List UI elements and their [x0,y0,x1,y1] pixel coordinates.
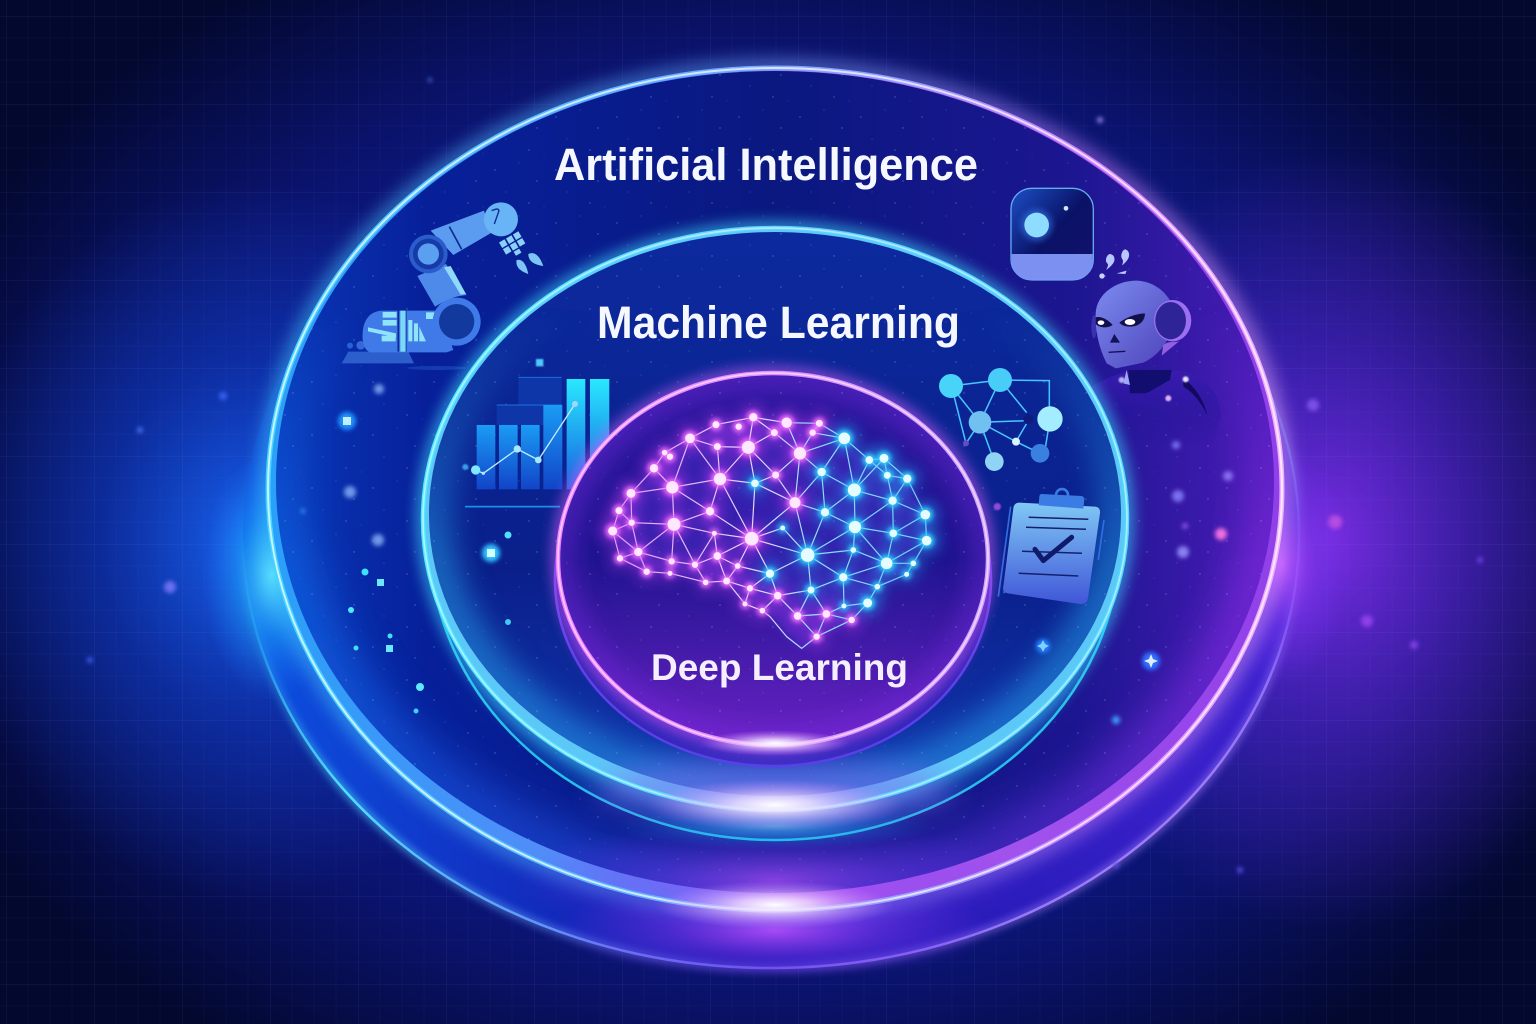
icon: sparkle right [1142,652,1160,670]
heading: Machine Learning: Machine Learning [597,297,960,348]
icon: network graph [939,368,1063,471]
icon: chat robot device [1011,188,1129,280]
heading: Deep Learning: Deep Learning [651,647,908,688]
icon: sparkle left [338,412,356,430]
icon: glowing neural network brain [609,414,930,648]
icon: robot arm [342,202,543,370]
icon: sparkle lower right [1036,639,1050,653]
heading: Artificial Intelligence: Artificial Intelligence [554,139,978,190]
bottom ring highlights [645,730,905,929]
outer echo ring [243,374,1300,976]
icon: robot head and shoulders [1091,281,1221,447]
panel: Machine Learning circle [423,228,1127,850]
panel: Artificial Intelligence circle [268,68,1282,940]
icon: bar chart with trend line [462,359,609,507]
particles in the ML ring [482,532,1050,653]
background bokeh particles [87,78,1483,873]
icon: thought marks [1106,249,1129,270]
particles in the AI ring [301,384,1233,868]
icon: clipboard with check mark [994,489,1104,604]
side and bottom glows [202,445,1352,980]
panel: Deep Learning circle [555,373,991,766]
